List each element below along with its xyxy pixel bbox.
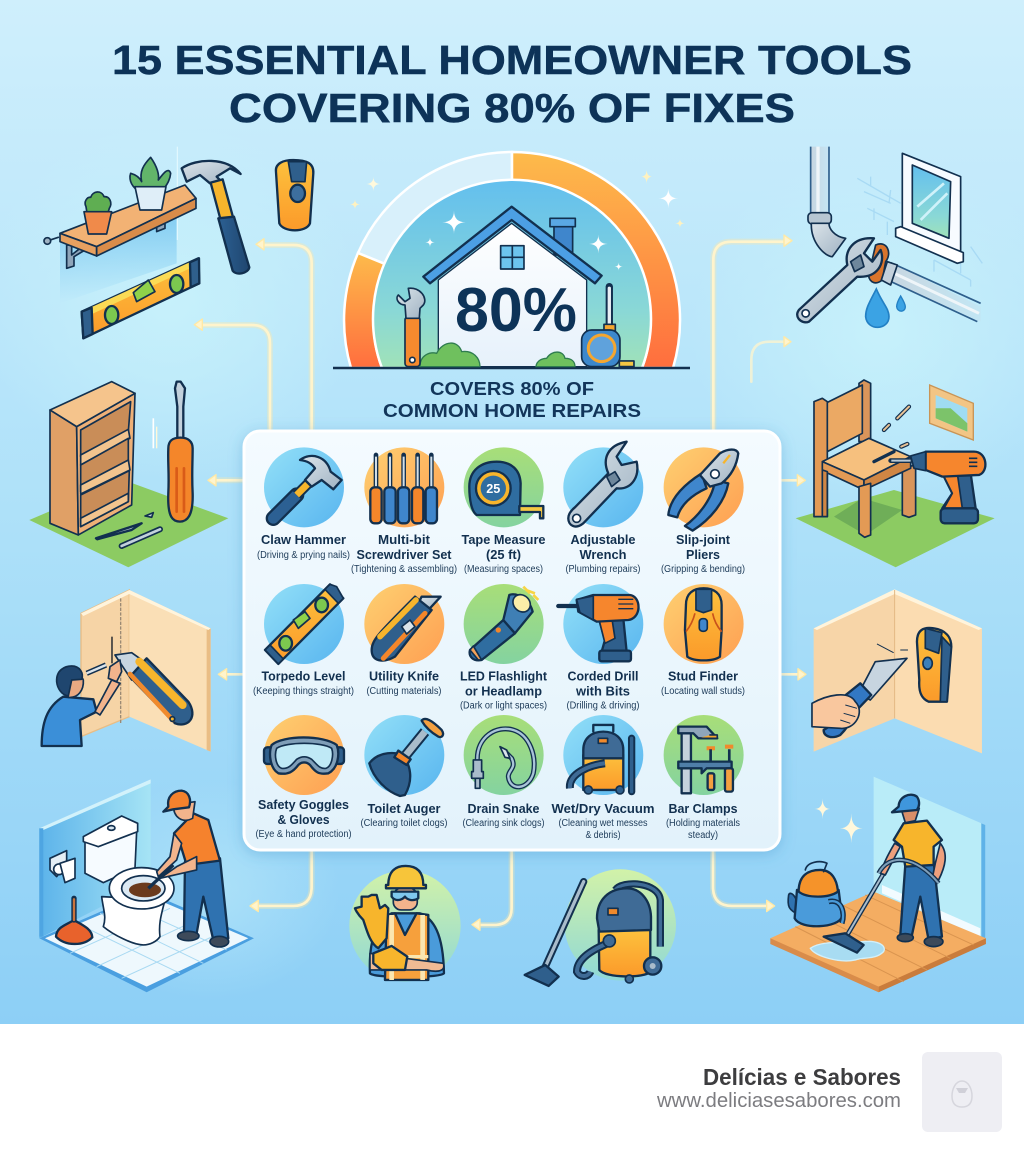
sparkles around gauge — [350, 169, 685, 271]
tool: screwdriver set: (Tightening & assembling) — [351, 564, 457, 575]
gauge: 80 percent arch — [333, 152, 690, 368]
tool: LED flashlight: or Headlamp — [465, 684, 542, 699]
tool: torpedo level: Torpedo Level — [262, 669, 346, 684]
scene: wet dry vacuum — [525, 869, 676, 986]
footer band — [0, 1024, 1024, 1154]
tool: drain snake: (Clearing sink clogs) — [462, 818, 544, 829]
scene: cutting drywall with utility knife — [42, 590, 211, 752]
tool: toilet auger — [360, 715, 448, 829]
scene: bookshelf and screwdriver — [29, 382, 228, 567]
tool: LED flashlight: LED Flashlight — [460, 669, 548, 684]
tool: torpedo level: (Keeping things straight) — [253, 686, 354, 697]
tool: utility knife: Utility Knife — [369, 669, 439, 684]
footer logo — [922, 1052, 1002, 1132]
gauge caption: COMMON HOME REPAIRS — [383, 400, 641, 421]
tool: slip-joint pliers — [661, 447, 745, 575]
tool: drain snake — [462, 715, 544, 829]
scene: leaking pipe and wrench — [797, 147, 982, 327]
tool: stud finder: Stud Finder — [668, 669, 738, 684]
tool: bar clamps: steady) — [688, 830, 718, 841]
tool: utility knife: (Cutting materials) — [366, 686, 442, 697]
scene: vacuuming wet floor — [770, 777, 986, 992]
tool: stud finder: (Locating wall studs) — [661, 686, 745, 697]
scene: stud finder and knife on wall — [812, 589, 982, 753]
scene: chair and drill — [796, 380, 995, 567]
arrows: connectors lower — [218, 669, 512, 930]
tool: utility knife — [364, 584, 444, 697]
tool: wet dry vacuum: & debris) — [586, 830, 620, 841]
tool: tape measure: (25 ft) — [486, 547, 521, 562]
tool: drill — [558, 584, 643, 712]
tool: wet dry vacuum: Wet/Dry Vacuum — [552, 801, 654, 816]
footer brand text: Delícias e Sabores — [703, 1064, 901, 1090]
tool: toilet auger: (Clearing toilet clogs) — [360, 818, 448, 829]
gauge value: 80% — [455, 276, 577, 345]
tool: safety goggles: & Gloves — [278, 812, 330, 827]
tool: claw hammer — [257, 447, 350, 561]
tool: drill: Corded Drill — [568, 669, 638, 684]
scene: shelf, hammer, level, stud finder — [44, 147, 313, 448]
tool: torpedo level — [253, 584, 354, 697]
tool: adjustable wrench: Adjustable — [570, 532, 636, 547]
footer brand text — [656, 1064, 901, 1112]
house illustration — [397, 207, 634, 367]
footer brand text: www.deliciasesabores.com — [656, 1090, 901, 1112]
tool: toilet auger: Toilet Auger — [368, 801, 440, 816]
panel: 15 tools grid — [244, 431, 780, 850]
tool: safety goggles — [256, 715, 352, 840]
tool: screwdriver set — [351, 447, 457, 575]
tool: tape measure — [462, 447, 546, 575]
tool: safety goggles: (Eye & hand protection) — [256, 829, 352, 840]
tool: bar clamps: Bar Clamps — [668, 801, 738, 816]
tool: adjustable wrench: (Plumbing repairs) — [566, 564, 640, 575]
tool: adjustable wrench: Wrench — [580, 547, 627, 562]
tool: wet dry vacuum — [552, 715, 654, 841]
gauge caption: COVERS 80% OF — [430, 378, 594, 399]
scene: toilet repair — [39, 779, 254, 992]
tool: wet dry vacuum: (Cleaning wet messes — [558, 818, 648, 829]
arrows: connectors upper right — [713, 235, 805, 486]
tool: slip-joint pliers: Pliers — [686, 547, 720, 562]
title: COVERING 80% OF FIXES — [229, 85, 795, 131]
tool: claw hammer: (Driving & prying nails) — [257, 550, 350, 561]
arrows: connectors lower right — [713, 669, 806, 912]
scene: safety gear worker — [349, 866, 461, 982]
tool: adjustable wrench — [563, 442, 643, 575]
tool: claw hammer: Claw Hammer — [261, 532, 346, 547]
tool: slip-joint pliers: (Gripping & bending) — [661, 564, 745, 575]
tool: screwdriver set: Screwdriver Set — [356, 547, 452, 562]
tool: tape measure: 25 — [486, 482, 500, 496]
tool: tape measure: Tape Measure — [462, 532, 546, 547]
tool: bar clamps — [664, 715, 744, 841]
tool: drain snake: Drain Snake — [468, 801, 540, 816]
tool: drill: (Drilling & driving) — [566, 700, 640, 712]
arrows: connectors upper left — [194, 239, 312, 486]
tool: LED flashlight: (Dark or light spaces) — [460, 700, 547, 712]
tool: drill: with Bits — [575, 684, 630, 699]
tool: tape measure: (Measuring spaces) — [464, 564, 543, 575]
tool: slip-joint pliers: Slip-joint — [676, 532, 731, 547]
title — [112, 37, 912, 131]
tool: bar clamps: (Holding materials — [666, 818, 740, 829]
tool: safety goggles: Safety Goggles — [258, 797, 349, 812]
gauge caption — [383, 378, 641, 421]
title: 15 ESSENTIAL HOMEOWNER TOOLS — [112, 37, 912, 83]
tool: screwdriver set: Multi-bit — [378, 532, 431, 547]
tool: LED flashlight — [460, 584, 548, 712]
tool: stud finder — [661, 584, 745, 697]
